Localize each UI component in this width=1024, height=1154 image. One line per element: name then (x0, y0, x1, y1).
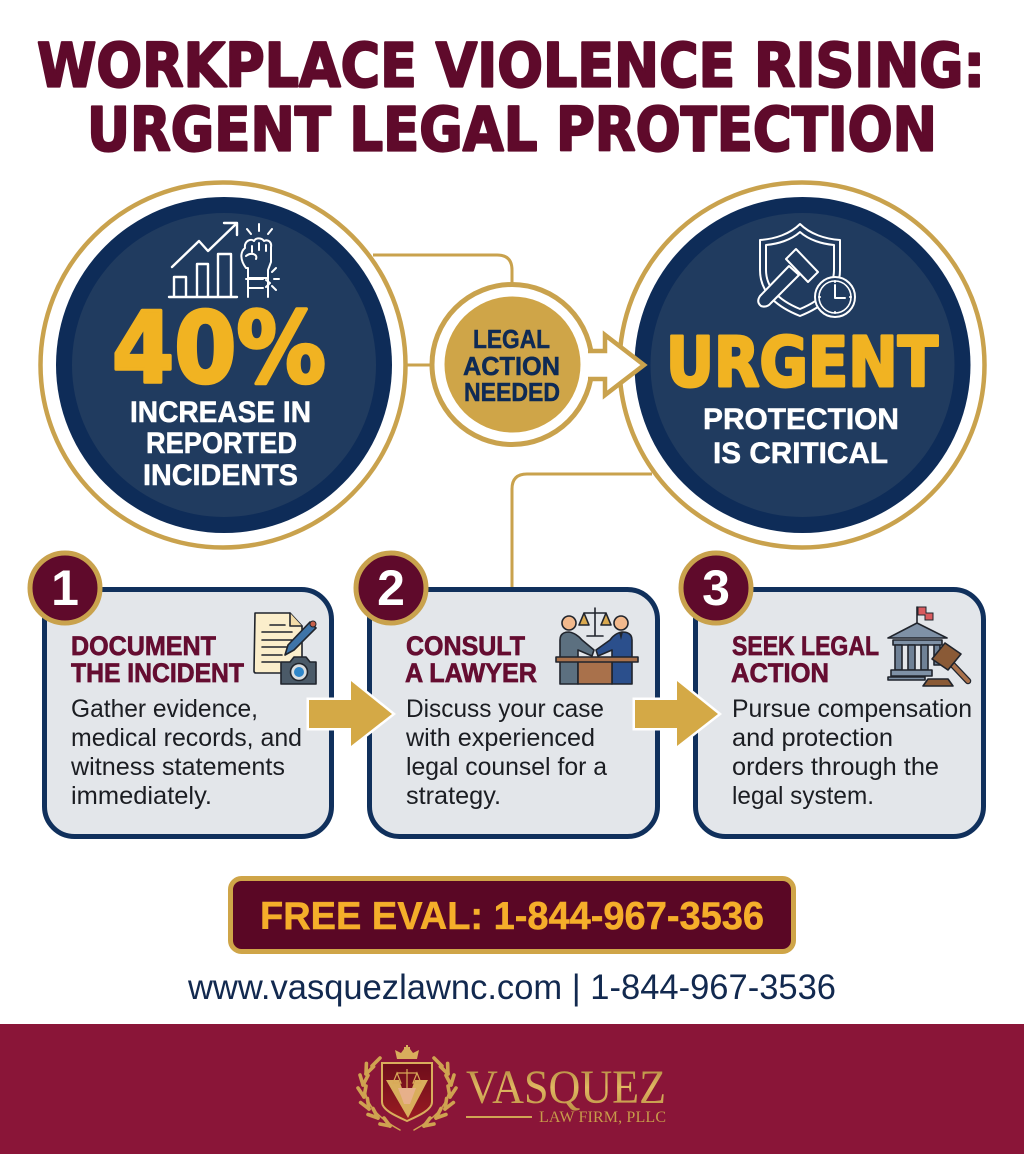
footer band (0, 1024, 1024, 1154)
icon: lawyer handshake with scales (556, 608, 638, 684)
step 3 body text: orders through the (732, 753, 939, 781)
step 2 body text: Discuss your case (406, 695, 604, 723)
stat caption: REPORTED (146, 427, 297, 460)
step 1 heading (71, 631, 244, 688)
big number 40%: 40% (112, 292, 326, 406)
icon: shield, gavel and clock (758, 224, 855, 317)
panel: legal action needed circle (432, 284, 592, 444)
step 3 body text (732, 695, 972, 810)
panel: urgent circle (620, 182, 984, 548)
step 1 heading: THE INCIDENT (71, 658, 244, 688)
panel: step 1 document (30, 553, 332, 836)
label text: LEGAL (473, 324, 550, 354)
arrow: step 2 to step 3 (635, 681, 718, 746)
step 1 body text (70, 695, 302, 810)
step 2 body text: legal counsel for a (406, 753, 607, 781)
stat caption: INCREASE IN (130, 396, 311, 429)
urgent caption: PROTECTION (703, 403, 899, 436)
step 2 heading (405, 631, 537, 688)
stat caption: INCIDENTS (143, 459, 298, 492)
logo wordmark: VASQUEZ (466, 1061, 666, 1114)
icon: courthouse and gavel (888, 607, 968, 686)
step 2 body text: with experienced (405, 724, 595, 752)
icon: rising chart and raised fist (169, 223, 279, 297)
step 1 badge (30, 553, 100, 623)
step 3 body text: and protection (732, 724, 893, 752)
step 3 heading (731, 631, 879, 688)
panel: step 3 legal action (681, 553, 984, 836)
connector lines (373, 255, 652, 588)
label text: NEEDED (464, 377, 560, 407)
urgent caption: IS CRITICAL (713, 437, 888, 470)
arrow: legal action to urgent (588, 335, 644, 395)
label text: ACTION (463, 351, 560, 381)
laurel wreath (358, 1058, 456, 1130)
step 2 heading: A LAWYER (405, 658, 537, 688)
logo emblem (358, 1045, 456, 1130)
step 3 body text: legal system. (732, 782, 874, 810)
panel: 40% statistic circle (40, 182, 406, 548)
contact line: www.vasquezlawnc.com | 1-844-967-3536 (187, 968, 836, 1007)
step 2 heading: CONSULT (406, 631, 525, 661)
label text (463, 324, 560, 407)
step 2 body text: strategy. (406, 782, 501, 810)
step 3 badge: 3 (702, 560, 730, 616)
step 3 heading: ACTION (731, 658, 829, 688)
stat caption (130, 396, 311, 492)
step 2 badge (356, 553, 426, 623)
arrow: step 1 to step 2 (309, 681, 392, 746)
step 1 badge: 1 (51, 560, 79, 616)
step 1 body text: medical records, and (71, 724, 302, 752)
title (37, 30, 985, 166)
urgent word: URGENT (666, 323, 938, 403)
step 3 badge (681, 553, 751, 623)
urgent caption (703, 403, 899, 470)
call to action button (230, 878, 794, 952)
call to action button: FREE EVAL: 1-844-967-3536 (260, 895, 764, 938)
logo wordmark: LAW FIRM, PLLC (539, 1109, 666, 1126)
panel: step 2 consult (356, 553, 658, 836)
step 1 body text: witness statements (70, 753, 285, 781)
crown (395, 1045, 419, 1059)
icon: document, pen and camera (254, 613, 316, 684)
step 2 badge: 2 (377, 560, 405, 616)
step 1 body text: immediately. (71, 782, 212, 810)
step 3 body text: Pursue compensation (732, 695, 972, 723)
step 1 heading: DOCUMENT (71, 631, 216, 661)
step 1 body text: Gather evidence, (71, 695, 258, 723)
step 2 body text (405, 695, 607, 810)
step 3 heading: SEEK LEGAL (732, 631, 879, 661)
